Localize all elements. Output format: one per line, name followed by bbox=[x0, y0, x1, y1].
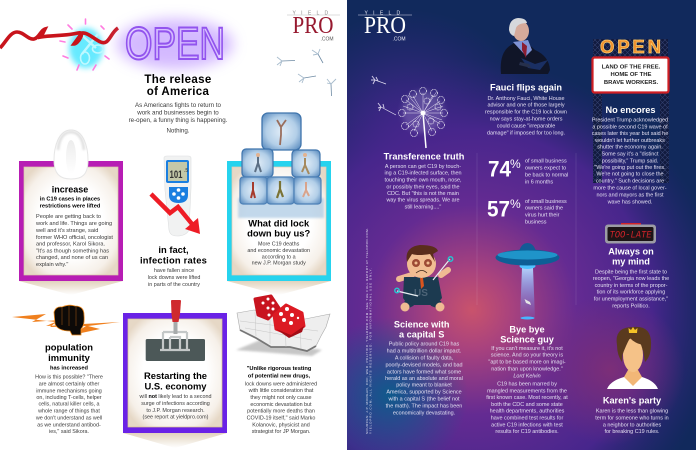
text: always on my mind: reopen, "Georgia now leads the bbox=[593, 276, 669, 282]
text: transference truth: or possibly their eyes, said the bbox=[386, 184, 460, 190]
text: population immunity: on, including T-cells, helper bbox=[36, 395, 102, 401]
text: population immunity: immune mechanisms going bbox=[36, 388, 102, 394]
stat: 74 percent: be back to normal bbox=[525, 172, 568, 178]
icon: voodoo doll: US bbox=[414, 288, 428, 299]
stat: 57 percent: owners said the bbox=[525, 206, 563, 212]
icon: too late clock bbox=[605, 223, 656, 244]
text: science with a capital S: with a capital S (the belief not bbox=[387, 397, 460, 403]
icon: marquee sign: BRAVE WORKERS. bbox=[604, 80, 658, 86]
intro text: As Americans fights to return to bbox=[135, 102, 222, 109]
panel: restarting the U.S. economy: U.S. economy bbox=[144, 380, 207, 392]
text: science with a capital S bbox=[385, 320, 463, 416]
text: unlike rigorous testing: strategist for JP Morgan. bbox=[252, 429, 310, 435]
icon: too late clock: TOO-LATE bbox=[610, 230, 652, 242]
left page background bbox=[0, 0, 347, 450]
panel: increase: "It's as though something has bbox=[36, 248, 109, 254]
panel: increase bbox=[19, 130, 123, 295]
text: population immunity: as we understand antibod- bbox=[37, 422, 101, 428]
text: Karen's party: for breaking C19 rules. bbox=[604, 429, 660, 435]
text: no encores: more the cause of local gover- bbox=[593, 186, 667, 192]
stat: 57 percent: business bbox=[525, 220, 547, 226]
panel: restarting the U.S. economy: Restarting the bbox=[144, 370, 207, 381]
text: transference truth bbox=[384, 152, 465, 211]
text: population immunity: whole range of things that bbox=[37, 409, 100, 415]
text: transference truth: CDC. But "this is not the main bbox=[387, 191, 459, 197]
stat: 57 percent: % bbox=[510, 197, 521, 211]
panel: increase: explain why." bbox=[36, 262, 68, 268]
text: bye bye science guy: If you can't measure it, it's not bbox=[491, 346, 563, 352]
text: population immunity: ies," said Sikora. bbox=[49, 429, 89, 435]
text: population immunity: has increased bbox=[50, 365, 88, 371]
text: always on my mind: Always on bbox=[608, 246, 654, 256]
text: unlike rigorous testing: with little consideration that bbox=[248, 388, 314, 394]
text: Fauci flips again: Dr. Anthony Fauci, White House bbox=[487, 96, 565, 102]
panel: restarting the U.S. economy bbox=[123, 300, 227, 448]
text: transference truth: still learning...." bbox=[405, 205, 441, 211]
text: population immunity: cells, natural killer cells, a bbox=[38, 402, 100, 408]
text: bye bye science guy: have combined test results for bbox=[491, 415, 563, 421]
icon: floating dandelion seeds bbox=[277, 49, 336, 96]
icon: Fauci portrait bbox=[501, 18, 550, 74]
stat: 57 percent: of small business bbox=[525, 199, 567, 205]
logo: Yield Pro left: .COM bbox=[320, 36, 334, 42]
stat: 74 percent: in 6 months bbox=[525, 179, 553, 185]
text: unlike rigorous testing: lock downs were administered bbox=[245, 381, 317, 387]
text: transference truth: touching their own mouth, nose, bbox=[384, 177, 462, 183]
text: science with a capital S: economically devastating. bbox=[393, 410, 456, 416]
text: unlike rigorous testing bbox=[245, 366, 317, 435]
text: science with a capital S: herald as an absolute and moral bbox=[385, 376, 463, 382]
title: of America bbox=[147, 86, 210, 98]
text: science with a capital S: actors have formed what some bbox=[387, 369, 461, 375]
panel: what did lock down buy us: and economic devastation bbox=[247, 248, 310, 254]
text: vertical source note: YIELDPRO.COM, ALL RIGHTS RESERVED. FOR INFORMATIONAL USE ONLY. bbox=[368, 268, 372, 434]
panel: what did lock down buy us: new J.P. Morgan study bbox=[252, 260, 306, 266]
panel: restarting the U.S. economy: to J.P. Morgan research. bbox=[146, 408, 205, 414]
text: bye bye science guy: nation than upon knowledge." bbox=[491, 367, 563, 373]
icon: fist with lightning bbox=[12, 305, 120, 335]
text: science with a capital S: America, supported by Science bbox=[386, 390, 462, 396]
icon: dandelion bbox=[371, 76, 448, 148]
text: bye bye science guy: first known case. Most recently, at bbox=[486, 395, 568, 401]
text: no encores bbox=[592, 105, 668, 205]
text: science with a capital S: Science with bbox=[394, 320, 450, 330]
text: bye bye science guy: both the CDC and some state bbox=[491, 402, 563, 408]
text: no encores: shutter the economy again. bbox=[597, 145, 663, 151]
icon: red dice over US map bbox=[236, 296, 330, 356]
text: no encores: President Trump acknowledged bbox=[592, 118, 668, 124]
icon: large zero bbox=[54, 130, 88, 179]
text: in fact infection rates: have fallen since bbox=[154, 268, 194, 274]
text: population immunity: population bbox=[45, 342, 93, 352]
text: bye bye science guy: Lord Kelvin bbox=[513, 373, 541, 379]
icon: voodoo doll bbox=[395, 245, 453, 312]
text: transference truth: ing a C19-infected surface, then bbox=[384, 171, 462, 177]
text: Karen's party: Karen is the less than glowing bbox=[596, 409, 668, 415]
logo: Yield Pro right: .COM bbox=[392, 36, 406, 42]
text: bye bye science guy: "apt to be based more on imagi- bbox=[488, 360, 566, 366]
intro text: work and businesses begin to bbox=[136, 109, 219, 116]
neon open sign: OPEN bbox=[125, 18, 225, 69]
text: no encores: wouldn't let further outbreaks bbox=[594, 138, 665, 144]
text: unlike rigorous testing: "Unlike rigorous testing bbox=[247, 366, 312, 372]
text: Fauci flips again: Fauci flips again bbox=[490, 82, 562, 92]
text: Karen's party: term for someone who turns in bbox=[595, 415, 669, 421]
text: bye bye science guy: Bye bye bbox=[509, 325, 545, 335]
icon: Karen portrait bbox=[607, 327, 658, 389]
text: population immunity: we don't understand as well bbox=[35, 415, 102, 421]
intro text: Nothing. bbox=[166, 128, 190, 134]
panel: restarting the U.S. economy: (see report at yieldpro.com) bbox=[143, 415, 209, 421]
text: Fauci flips again: damage" if imposed for too long. bbox=[487, 130, 566, 136]
text: no encores: Some say it's a "distinct bbox=[601, 151, 659, 157]
text: population immunity: immunity bbox=[48, 352, 91, 363]
text: transference truth: Transference truth bbox=[384, 152, 465, 162]
text: always on my mind: reports Politico. bbox=[612, 303, 650, 309]
text: science with a capital S: poorly-devised models, and bad bbox=[385, 362, 463, 368]
text: no encores: No encores bbox=[605, 105, 656, 115]
text: unlike rigorous testing: potentially more deaths than bbox=[247, 409, 315, 415]
panel: increase: restrictions were lifted bbox=[40, 204, 101, 210]
icon: UFO with beam bbox=[496, 243, 560, 320]
panel: what did lock down buy us: More C19 deaths bbox=[258, 241, 300, 247]
logo: Yield Pro left: YIELD bbox=[293, 10, 333, 16]
logo: Yield Pro right: YIELD bbox=[365, 10, 405, 16]
text: population immunity bbox=[35, 342, 103, 435]
text: Karen's party bbox=[595, 396, 669, 435]
text: science with a capital S: Public policy around C19 has bbox=[389, 342, 459, 348]
title: The release bbox=[144, 74, 212, 86]
text: always on my mind: tion of its workforce applying bbox=[597, 290, 665, 296]
text: no encores: "We're going put out the fires. bbox=[594, 165, 666, 171]
text: Fauci flips again bbox=[485, 82, 567, 136]
panel: restarting the U.S. economy: will not likely lead to a second bbox=[139, 394, 211, 400]
text: Fauci flips again: advisor and one of those largely bbox=[487, 103, 565, 109]
text: Karen's party: a neighbor to authorities bbox=[603, 422, 661, 428]
text: no encores: country." Such decisions are bbox=[596, 179, 664, 185]
text: Fauci flips again: could cause "irreparable bbox=[497, 123, 555, 129]
text: science with a capital S: a capital S bbox=[399, 330, 444, 340]
panel: increase: in C19 cases in places bbox=[40, 197, 100, 203]
text: bye bye science guy: active C19 infections with test bbox=[491, 422, 563, 428]
text: bye bye science guy bbox=[486, 325, 568, 435]
text: vertical source note bbox=[365, 228, 372, 434]
text: in fact infection rates: in fact, bbox=[158, 244, 189, 255]
text: unlike rigorous testing: COVID-19 itself," said Marko bbox=[247, 416, 315, 422]
text: Fauci flips again: now says stay-at-home orders bbox=[490, 117, 563, 123]
text: in fact infection rates: lock downs were lifted bbox=[148, 275, 200, 281]
stat: 74 percent: % bbox=[510, 157, 521, 171]
text: no encores: wave has showed. bbox=[607, 199, 653, 205]
panel: increase: former WHO official, oncologist bbox=[36, 235, 113, 241]
intro text: re-open, a funny thing is happening. bbox=[129, 117, 228, 124]
icon: neon scissors bbox=[60, 19, 109, 70]
panel: what did lock down buy us: down buy us? bbox=[247, 228, 310, 238]
text: no encores: possibility," Trump said. bbox=[602, 158, 659, 164]
text: transference truth: A person can get C19 by touch- bbox=[385, 164, 461, 170]
logo: Yield Pro right: PRO bbox=[364, 13, 406, 39]
panel: increase: changed, and none of us can bbox=[36, 255, 108, 261]
text: always on my mind: Despite being the first state to bbox=[595, 269, 667, 275]
icon: people frozen in ice cubes bbox=[238, 113, 324, 218]
icon: thermometer with falling red arrow: 101 bbox=[170, 169, 182, 181]
text: population immunity: How is this possible? "There bbox=[35, 374, 103, 380]
text: unlike rigorous testing: economic devastation but bbox=[250, 402, 312, 408]
text: Fauci flips again: responsible for the C19 lock down bbox=[485, 110, 567, 116]
icon: thermometer with falling red arrow bbox=[151, 156, 200, 236]
text: always on my mind: country in terms of the propor- bbox=[595, 283, 668, 289]
text: science with a capital S: the math). The impact has been bbox=[386, 403, 462, 409]
icon: ribbon cut by scissors bbox=[0, 28, 118, 48]
icon: restart switch bbox=[146, 300, 205, 361]
text: population immunity: are almost certainly other bbox=[39, 381, 99, 387]
text: vertical source note: SOURCES: J.P. MORGAN, CDC, WHO, POLITICO, YIELDPRO.COM. SEE THE FULL REPORT AT YIELDPRO.COM. bbox=[365, 228, 369, 434]
logo: Yield Pro left: PRO bbox=[292, 13, 334, 39]
stat: 57 percent: 57 bbox=[487, 196, 510, 222]
stat: 57 percent bbox=[487, 196, 567, 226]
text: bye bye science guy: results for C19 antibodies. bbox=[495, 429, 559, 435]
text: bye bye science guy: mangled measurements from the bbox=[487, 388, 567, 394]
text: bye bye science guy: Science guy bbox=[500, 335, 555, 345]
text: science with a capital S: A collision of faulty data, bbox=[395, 356, 454, 362]
text: always on my mind: for unemployment assistance," bbox=[594, 297, 668, 303]
icon: marquee sign bbox=[592, 36, 669, 183]
stat: 74 percent: of small business bbox=[525, 159, 567, 165]
icon: marquee sign: HOME OF THE bbox=[611, 72, 652, 78]
text: always on my mind: my mind bbox=[612, 256, 650, 266]
text: science with a capital S: policy meant to blanket bbox=[396, 383, 452, 389]
icon: thermometer with falling red arrow: .5 bbox=[184, 168, 188, 174]
text: no encores: a possible second C19 wave of bbox=[592, 124, 668, 130]
title bbox=[144, 74, 212, 98]
panel: what did lock down buy us: What did lock bbox=[248, 218, 310, 228]
text: in fact infection rates: infection rates bbox=[140, 254, 207, 266]
text: Karen's party: Karen's party bbox=[603, 396, 662, 406]
panel: what did lock down buy us: according to a bbox=[262, 255, 296, 261]
text: always on my mind bbox=[593, 246, 669, 309]
text: in fact infection rates: in parts of the country bbox=[148, 282, 200, 288]
text: no encores: We're not going to close the bbox=[596, 172, 664, 178]
stat: 74 percent: 74 bbox=[488, 156, 512, 182]
stat: 74 percent: owners expect to bbox=[525, 166, 566, 172]
stat: 57 percent: virus hurt their bbox=[525, 213, 560, 219]
panel: increase: well and it's strange, said bbox=[35, 228, 98, 234]
text: no encores: cases later this year but said he bbox=[592, 131, 668, 137]
text: unlike rigorous testing: of potential new drugs, bbox=[248, 373, 311, 379]
text: unlike rigorous testing: they might not only cause bbox=[250, 395, 312, 401]
text: in fact infection rates bbox=[140, 244, 207, 288]
panel: increase: increase bbox=[52, 184, 88, 194]
panel: increase: and professor, Karol Sikora. bbox=[36, 242, 105, 248]
text: transference truth: way the virus spreads. We are bbox=[385, 198, 460, 204]
panel: increase: work and life. Things are going bbox=[35, 221, 112, 227]
icon: marquee sign: LAND OF THE FREE. bbox=[602, 64, 661, 70]
text: science with a capital S: had a multitrillion dollar impact. bbox=[387, 349, 462, 355]
panel: what did lock down buy us bbox=[227, 113, 331, 295]
text: unlike rigorous testing: Kolanovic, physicist and bbox=[252, 422, 310, 428]
stat: 74 percent bbox=[488, 156, 568, 185]
panel: restarting the U.S. economy: surge of infections according bbox=[141, 401, 210, 407]
text: bye bye science guy: health departments, authorities bbox=[490, 409, 565, 415]
panel: increase: People are getting back to bbox=[36, 214, 101, 220]
text: no encores: nors and mayors as the first bbox=[596, 192, 664, 198]
right page background bbox=[347, 0, 696, 450]
intro text bbox=[129, 102, 228, 134]
icon: marquee sign: OPEN bbox=[600, 36, 661, 57]
text: bye bye science guy: science. And so your theory is bbox=[491, 353, 563, 359]
text: bye bye science guy: C19 has been marred by bbox=[497, 382, 557, 388]
